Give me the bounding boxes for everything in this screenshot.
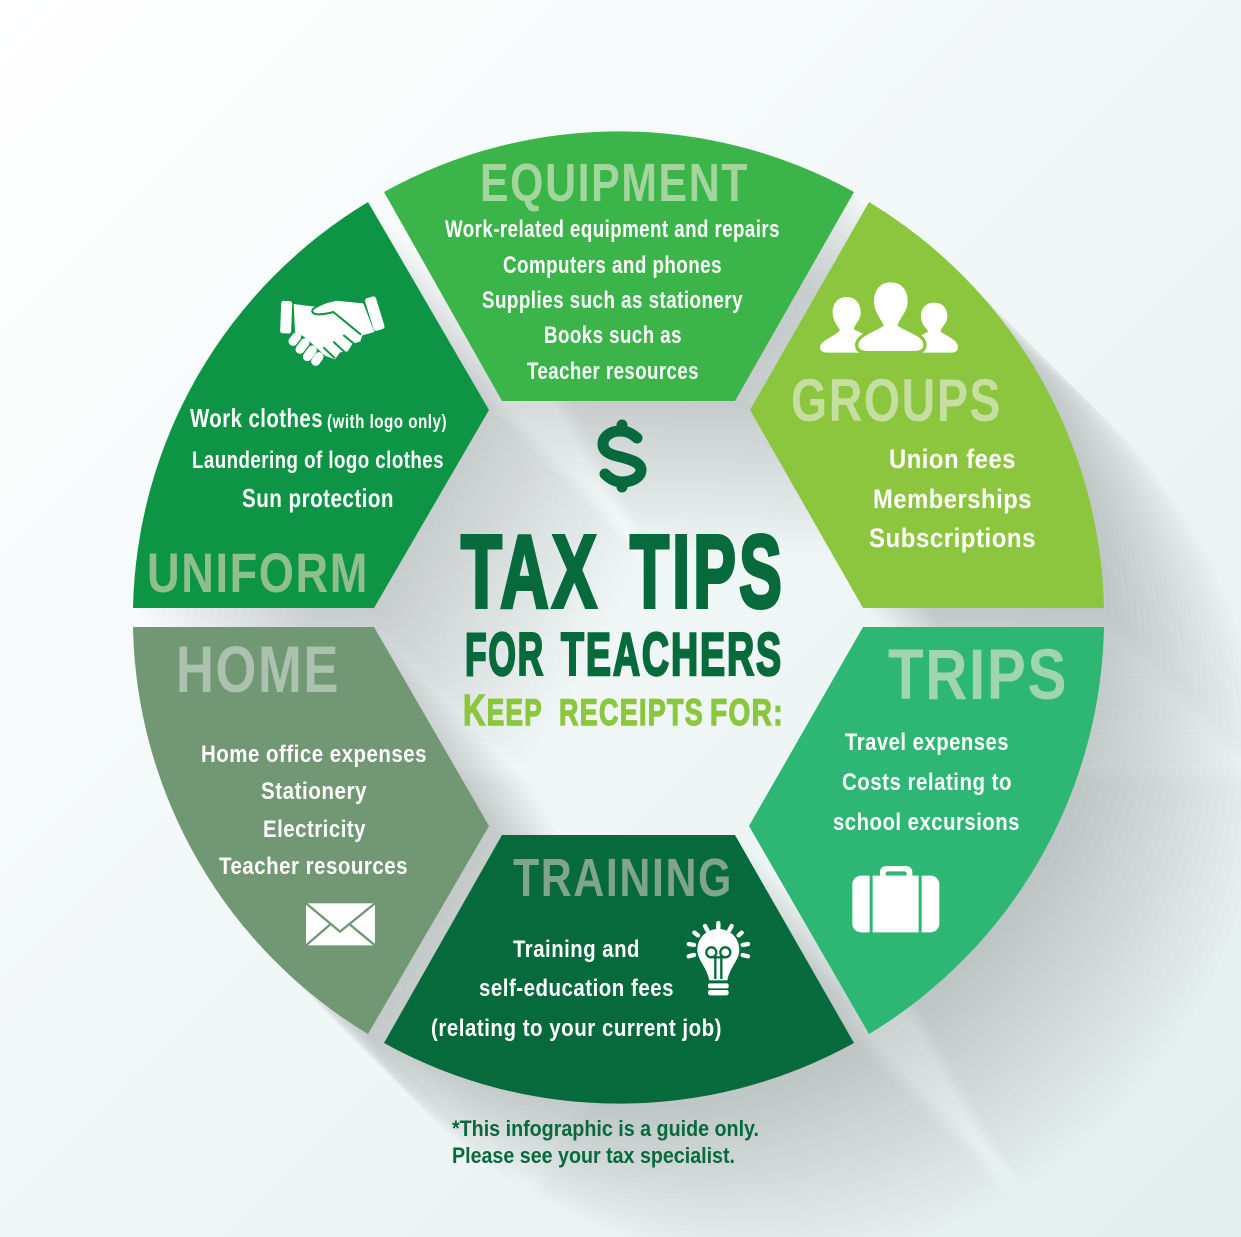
text: home items: Stationery: [261, 778, 367, 805]
heading: equipment: EQUIPMENT: [480, 153, 749, 213]
panel: groups: [750, 202, 1104, 608]
heading: training: TRAINING: [513, 848, 733, 908]
text: trips items: school excursions: [833, 809, 1020, 836]
title: tax tips: [461, 514, 785, 629]
text: groups items: [869, 444, 1036, 553]
text: home items: Electricity: [263, 816, 366, 843]
text: equipment items: Supplies such as stationery: [482, 287, 743, 314]
footnote: [452, 1116, 759, 1168]
panel: home: [133, 627, 489, 1034]
text: uniform items: Sun protection: [242, 483, 394, 513]
text: groups items: Union fees: [889, 444, 1016, 474]
text: equipment items: Books such as: [544, 322, 682, 349]
subtitle: for teachers: TEACHERS: [561, 621, 783, 688]
text: trips items: Costs relating to: [842, 769, 1012, 796]
subtitle: keep receipts for: KEEP: [463, 686, 543, 735]
text: uniform items: [190, 403, 447, 513]
subtitle: for teachers: FOR: [465, 621, 545, 688]
text: training items: (relating to your current job): [431, 1015, 722, 1042]
text: trips items: Travel expenses: [845, 729, 1009, 756]
text: uniform items: Work clothes: [190, 403, 323, 433]
icon: people: [820, 281, 958, 353]
text: trips items: [833, 729, 1020, 836]
text: equipment items: Work-related equipment and repairs: [445, 216, 780, 243]
icon: dollar sign: [603, 425, 641, 487]
text: equipment items: [445, 216, 780, 385]
text: groups items: Memberships: [873, 484, 1032, 514]
icon: suitcase: [852, 866, 939, 933]
subtitle: keep receipts for: FOR:: [710, 692, 784, 733]
icon: envelope: [306, 903, 375, 945]
title block: [461, 514, 785, 735]
text: training items: self-education fees: [479, 975, 674, 1002]
text: training items: Training and: [513, 936, 640, 963]
text: equipment items: Computers and phones: [503, 252, 722, 279]
long shadows of the wheel: [140, 138, 1241, 1237]
panel: training: [384, 835, 854, 1104]
text: home items: Teacher resources: [219, 853, 408, 880]
text: groups items: Subscriptions: [869, 523, 1036, 553]
title: tax tips: TAX: [461, 514, 600, 629]
text: home items: Home office expenses: [201, 741, 427, 768]
text: uniform items: (with logo only): [327, 412, 447, 433]
subtitle: for teachers: [465, 621, 783, 688]
title: tax tips: TIPS: [630, 514, 785, 629]
heading: home: HOME: [176, 632, 340, 706]
heading: trips: TRIPS: [888, 636, 1068, 715]
heading: groups: GROUPS: [791, 367, 1002, 434]
text: equipment items: Teacher resources: [527, 358, 699, 385]
text: uniform items: Laundering of logo clothes: [192, 447, 444, 474]
panel: equipment: [384, 131, 854, 401]
panel: uniform: [133, 202, 489, 608]
text: home items: [201, 741, 427, 880]
text: training items: [431, 936, 722, 1042]
icon: light bulb: [689, 923, 748, 995]
subtitle: keep receipts for: [463, 686, 784, 735]
panel: trips: [749, 627, 1104, 1034]
subtitle: keep receipts for: RECEIPTS: [559, 692, 704, 733]
icon: handshake: [280, 296, 385, 361]
footnote: *This infographic is a guide only.: [452, 1116, 759, 1141]
heading: uniform: UNIFORM: [147, 541, 369, 604]
footnote: Please see your tax specialist.: [452, 1143, 735, 1168]
